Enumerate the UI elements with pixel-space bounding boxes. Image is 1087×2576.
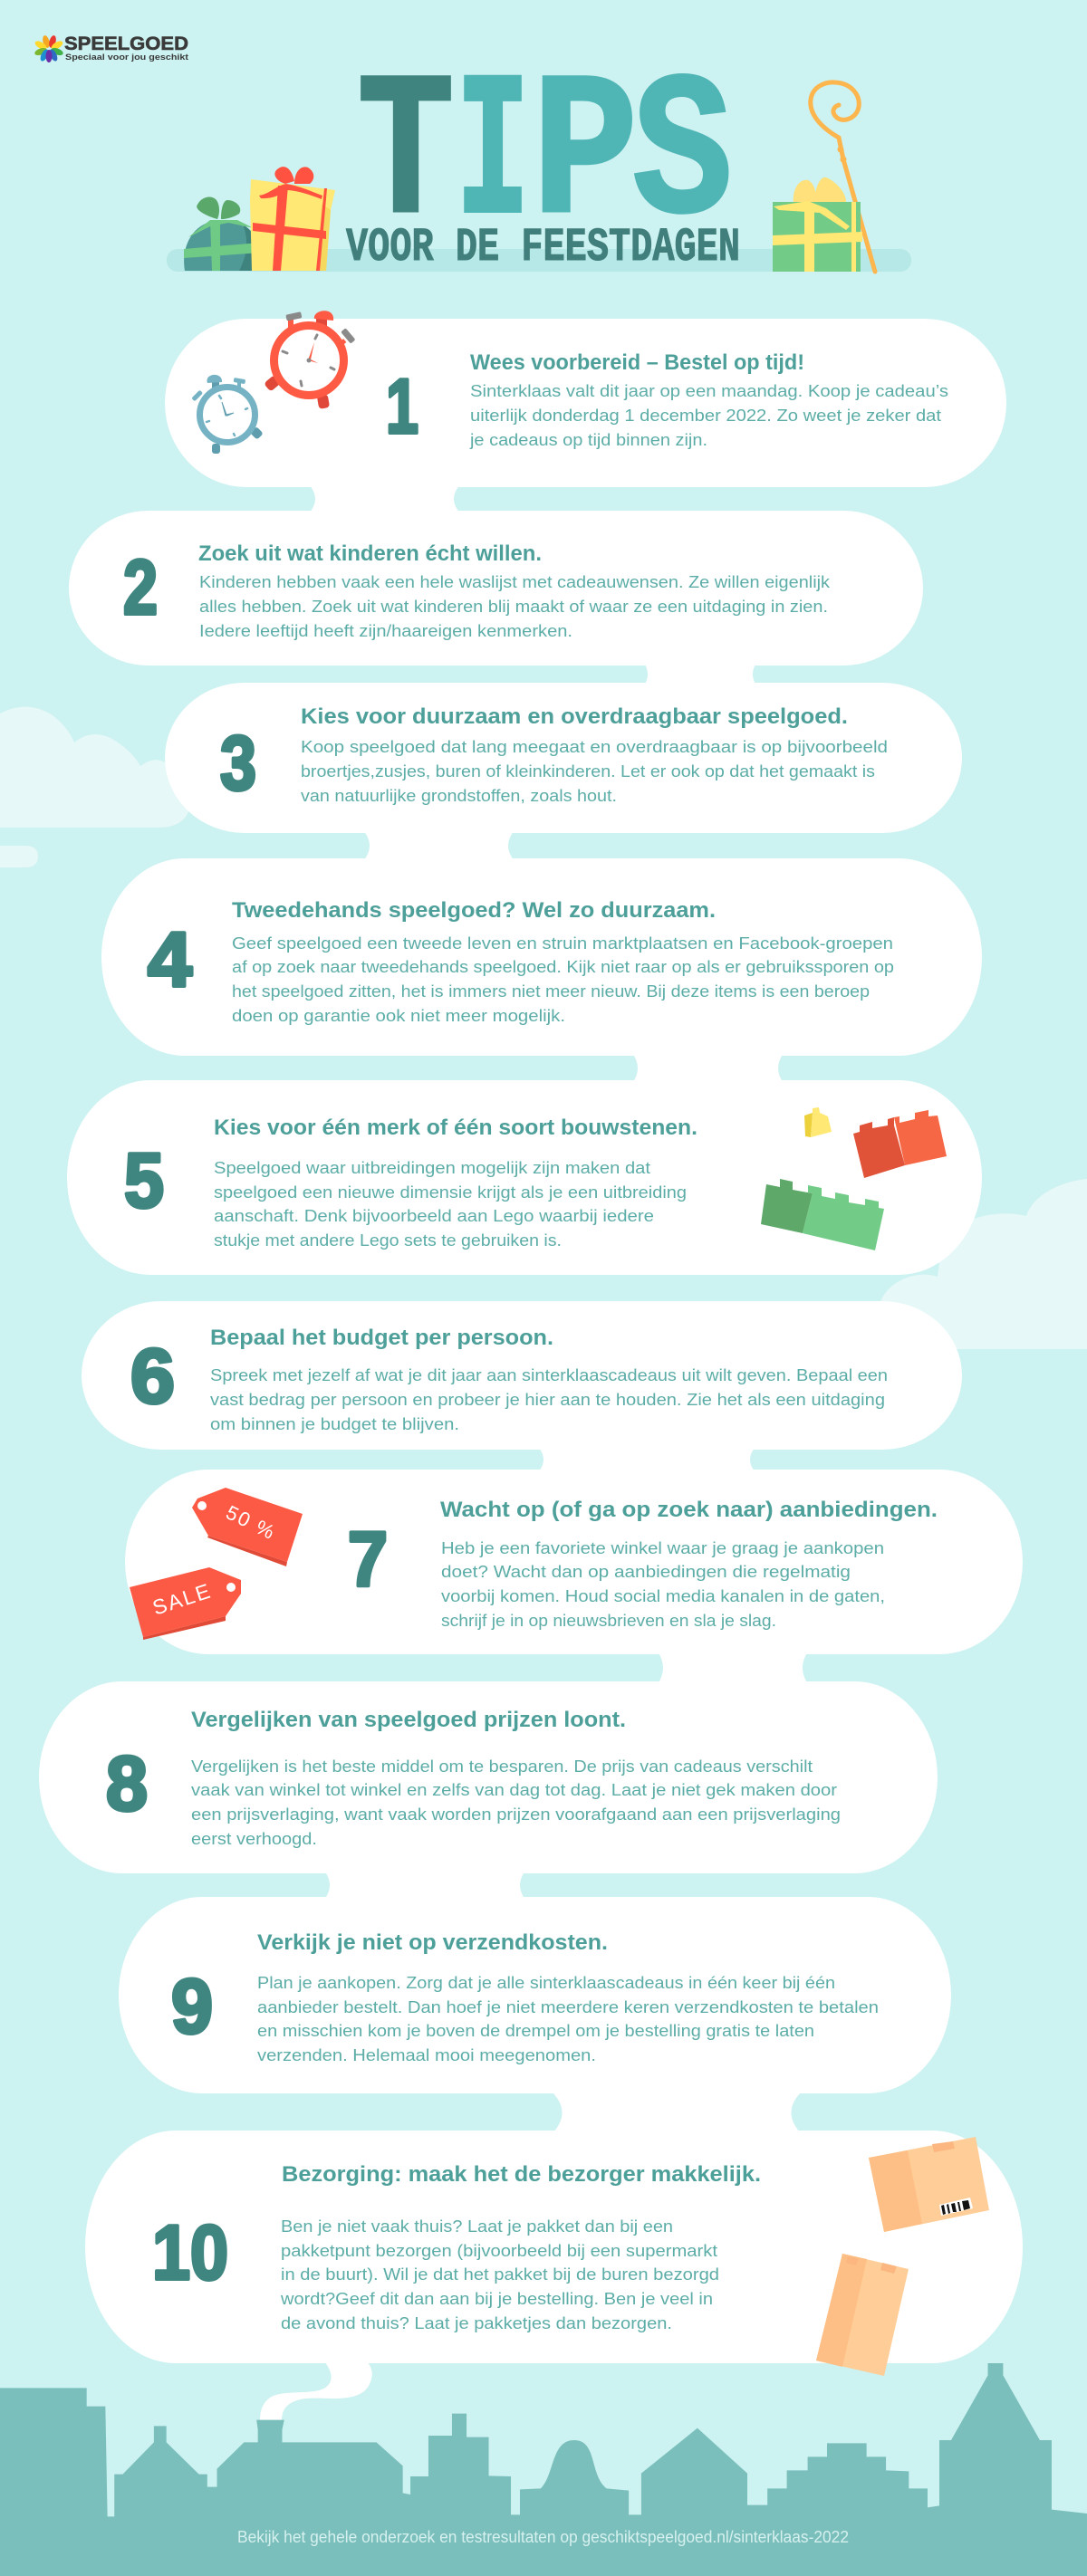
icon: blue alarm clock xyxy=(191,375,264,454)
icon: SALE price tag xyxy=(130,1567,241,1640)
city skyline xyxy=(0,2363,1087,2576)
body 8: vaak van winkel tot winkel en zelfs van dag tot dag. Laat je niet gek maken door xyxy=(191,1780,837,1799)
body 7: Heb je een favoriete winkel waar je graag je aankopen xyxy=(441,1538,884,1557)
body 2: Kinderen hebben vaak een hele waslijst met cadeauwensen. Ze willen eigenlijk xyxy=(199,572,831,591)
title: TIPS xyxy=(357,42,733,273)
icon: bishop staff xyxy=(811,82,875,272)
shelf bar xyxy=(167,249,911,272)
background cloud: small left xyxy=(0,846,38,867)
logo: Speelgoed xyxy=(34,34,189,62)
body 2: alles hebben. Zoek uit wat kinderen blij maakt of waar ze een uitdaging in zien. xyxy=(199,597,828,616)
background cloud: left xyxy=(0,706,190,828)
panel 2: kinderen xyxy=(69,511,923,685)
body 1: uiterlijk donderdag 1 december 2022. Zo weet je zeker dat xyxy=(470,406,941,425)
panel 6 background xyxy=(82,1301,962,1450)
heading 3: Kies voor duurzaam en overdraagbaar speelgoed. xyxy=(301,704,848,729)
number 5: 5 xyxy=(124,1138,164,1224)
body 8: een prijsverlaging, want vaak worden prijzen voorafgaand aan een prijsverlaging xyxy=(191,1805,841,1824)
body 7: schrijf je in op nieuwsbrieven en sla je slag. xyxy=(441,1611,776,1630)
panel 7 background xyxy=(125,1470,1023,1654)
body 10: pakketpunt bezorgen (bijvoorbeeld bij een supermarkt xyxy=(281,2241,717,2260)
body 5 xyxy=(214,1158,687,1250)
number 1: 1 xyxy=(386,364,418,450)
body 4: doen op garantie ook niet meer mogelijk. xyxy=(232,1006,565,1025)
panel 4 background xyxy=(101,858,982,1056)
panel 4: tweedehands xyxy=(101,858,982,1083)
body 3: van natuurlijke grondstoffen, zoals hout. xyxy=(301,786,617,805)
icon: red alarm clock xyxy=(264,311,355,409)
connector 7-8 xyxy=(658,1652,808,1684)
title: TIPS: P xyxy=(532,42,639,273)
body 10: de avond thuis? Laat je pakketjes dan bezorgen. xyxy=(281,2313,672,2332)
body 2: Iedere leeftijd heeft zijn/haareigen kenmerken. xyxy=(199,621,572,640)
body 6: om binnen je budget te blijven. xyxy=(210,1414,459,1433)
panel 1 background xyxy=(165,319,1006,487)
icon: tall parcel xyxy=(816,2254,909,2376)
title: TIPS: I xyxy=(456,42,530,273)
panel 2 background xyxy=(69,511,923,666)
icon: colour pinwheel xyxy=(34,34,64,62)
body 8: eerst verhoogd. xyxy=(191,1829,317,1848)
connector 3-4 xyxy=(363,830,515,861)
number 2: 2 xyxy=(123,545,158,631)
body 7: voorbij komen. Houd social media kanalen in de gaten, xyxy=(441,1586,885,1605)
heading 1: Wees voorbereid – Bestel op tijd! xyxy=(470,350,804,375)
body 7: doet? Wacht dan op aanbiedingen die regelmatig xyxy=(441,1562,851,1581)
number 3: 3 xyxy=(220,721,256,807)
logo tagline: Speciaal voor jou geschikt xyxy=(65,53,189,62)
body 10 xyxy=(280,2217,719,2332)
number 4: 4 xyxy=(148,917,192,1003)
title: TIPS: S xyxy=(632,42,733,273)
panel 10: bezorging xyxy=(85,2131,1023,2376)
panel 5 background xyxy=(67,1080,982,1275)
body 4: het speelgoed zitten, het is immers niet meer nieuw. Bij deze items is een beroep xyxy=(232,982,870,1001)
body 4: Geef speelgoed een tweede leven en struin marktplaatsen en Facebook-groepen xyxy=(232,934,893,953)
icon: SALE price tag: SALE xyxy=(149,1578,215,1620)
icon: 50% price tag: 50 % xyxy=(223,1501,280,1545)
heading 5: Kies voor één merk of één soort bouwstenen. xyxy=(214,1116,697,1140)
icon: green gift xyxy=(773,177,862,272)
panel 9 background xyxy=(119,1897,951,2093)
logo wordmark: SPEELGOED xyxy=(64,34,188,54)
number 9: 9 xyxy=(171,1964,213,2050)
panel 3: duurzaam xyxy=(165,683,962,861)
body 9: Plan je aankopen. Zorg dat je alle sinterklaascadeaus in één keer bij één xyxy=(257,1973,835,1992)
body 5: speelgoed een nieuwe dimensie krijgt als je een uitbreiding xyxy=(214,1183,687,1202)
panel 3 background xyxy=(165,683,962,833)
body 2 xyxy=(199,572,831,640)
icon: yellow gift xyxy=(250,167,335,271)
body 5: Speelgoed waar uitbreidingen mogelijk zijn maken dat xyxy=(214,1158,650,1177)
body 6: Spreek met jezelf af wat je dit jaar aan sinterklaascadeaus uit wilt geven. Bepaal een xyxy=(210,1365,888,1384)
icon: 50% price tag xyxy=(192,1488,303,1566)
heading 7: Wacht op (of ga op zoek naar) aanbiedingen. xyxy=(440,1498,938,1522)
connector 1-2 xyxy=(309,484,460,513)
panel 7: aanbiedingen xyxy=(125,1470,1023,1684)
heading 2: Zoek uit wat kinderen écht willen. xyxy=(198,541,542,566)
body 1: Sinterklaas valt dit jaar op een maandag. Koop je cadeau’s xyxy=(470,381,948,400)
body 3: Koop speelgoed dat lang meegaat en overdraagbaar is op bijvoorbeeld xyxy=(301,737,888,756)
body 10: Ben je niet vaak thuis? Laat je pakket dan bij een xyxy=(281,2217,673,2236)
icon: yellow brick xyxy=(804,1107,832,1137)
icon: round gift xyxy=(184,197,261,271)
heading 9: Verkijk je niet op verzendkosten. xyxy=(257,1930,608,1955)
body 4: af op zoek naar tweedehands speelgoed. Kijk niet raar op als er gebruikssporen op xyxy=(232,957,894,976)
heading 6: Bepaal het budget per persoon. xyxy=(210,1326,553,1350)
body 9: aanbieder bestelt. Dan hoef je niet meerdere keren verzendkosten te betalen xyxy=(257,1997,879,2016)
panel 9: verzendkosten xyxy=(119,1897,951,2133)
number 8: 8 xyxy=(106,1741,148,1827)
panel 8 background xyxy=(39,1681,938,1873)
body 8 xyxy=(191,1757,841,1848)
title: TIPS: T xyxy=(357,42,455,273)
body 3: broertjes,zusjes, buren of kleinkinderen. Let er ook op dat het gemaakt is xyxy=(301,761,875,780)
body 5: stukje met andere Lego sets te gebruiken is. xyxy=(214,1231,562,1250)
panel 5: bouwstenen xyxy=(67,1080,982,1275)
subtitle: VOOR DE FEESTDAGEN xyxy=(346,221,740,274)
connector 4-5 xyxy=(632,1053,784,1083)
number 10: 10 xyxy=(152,2210,228,2296)
connector 8-9 xyxy=(324,1871,525,1900)
background cloud: right xyxy=(876,1179,1087,1349)
body 3 xyxy=(301,737,888,805)
icon: green brick xyxy=(761,1179,884,1250)
body 4 xyxy=(232,934,894,1025)
body 7 xyxy=(441,1538,885,1630)
panel 10 background xyxy=(85,2131,1023,2363)
chimney smoke xyxy=(260,2361,372,2420)
body 6: vast bedrag per persoon en probeer je hier aan te houden. Zie het als een uitdaging xyxy=(210,1390,885,1409)
heading 4: Tweedehands speelgoed? Wel zo duurzaam. xyxy=(232,898,716,923)
body 1 xyxy=(469,381,948,449)
body 9: en misschien kom je boven de drempel om je bestelling gratis te laten xyxy=(257,2021,814,2040)
number 6: 6 xyxy=(130,1334,175,1420)
heading 8: Vergelijken van speelgoed prijzen loont. xyxy=(191,1708,626,1732)
connector 9-10 xyxy=(551,2091,803,2133)
connector 2-3 xyxy=(644,663,756,685)
body 10: in de buurt). Wil je dat het pakket bij de buren bezorgd xyxy=(281,2265,719,2284)
title block xyxy=(167,42,911,274)
heading 10: Bezorging: maak het de bezorger makkelijk. xyxy=(282,2162,761,2187)
body 9 xyxy=(257,1973,879,2064)
number 7: 7 xyxy=(348,1517,388,1603)
icon: parcel with barcode xyxy=(869,2137,989,2232)
body 9: verzenden. Helemaal mooi meegenomen. xyxy=(257,2045,596,2064)
body 6 xyxy=(210,1365,888,1433)
panel 8: vergelijken xyxy=(39,1681,938,1900)
panel 1: bestel op tijd xyxy=(165,311,1006,513)
panel 6: budget xyxy=(82,1301,962,1472)
body 8: Vergelijken is het beste middel om te besparen. De prijs van cadeaus verschilt xyxy=(191,1757,813,1776)
footer text: Bekijk het gehele onderzoek en testresultaten op geschiktspeelgoed.nl/sinterklaas-2022 xyxy=(237,2527,849,2546)
body 5: aanschaft. Denk bijvoorbeeld aan Lego waarbij iedere xyxy=(214,1206,654,1225)
icon: red brick xyxy=(853,1110,947,1178)
connector 6-7 xyxy=(538,1447,755,1472)
body 1: je cadeaus op tijd binnen zijn. xyxy=(469,430,707,449)
body 10: wordt?Geef dit dan aan bij je bestelling. Ben je veel in xyxy=(280,2289,713,2308)
